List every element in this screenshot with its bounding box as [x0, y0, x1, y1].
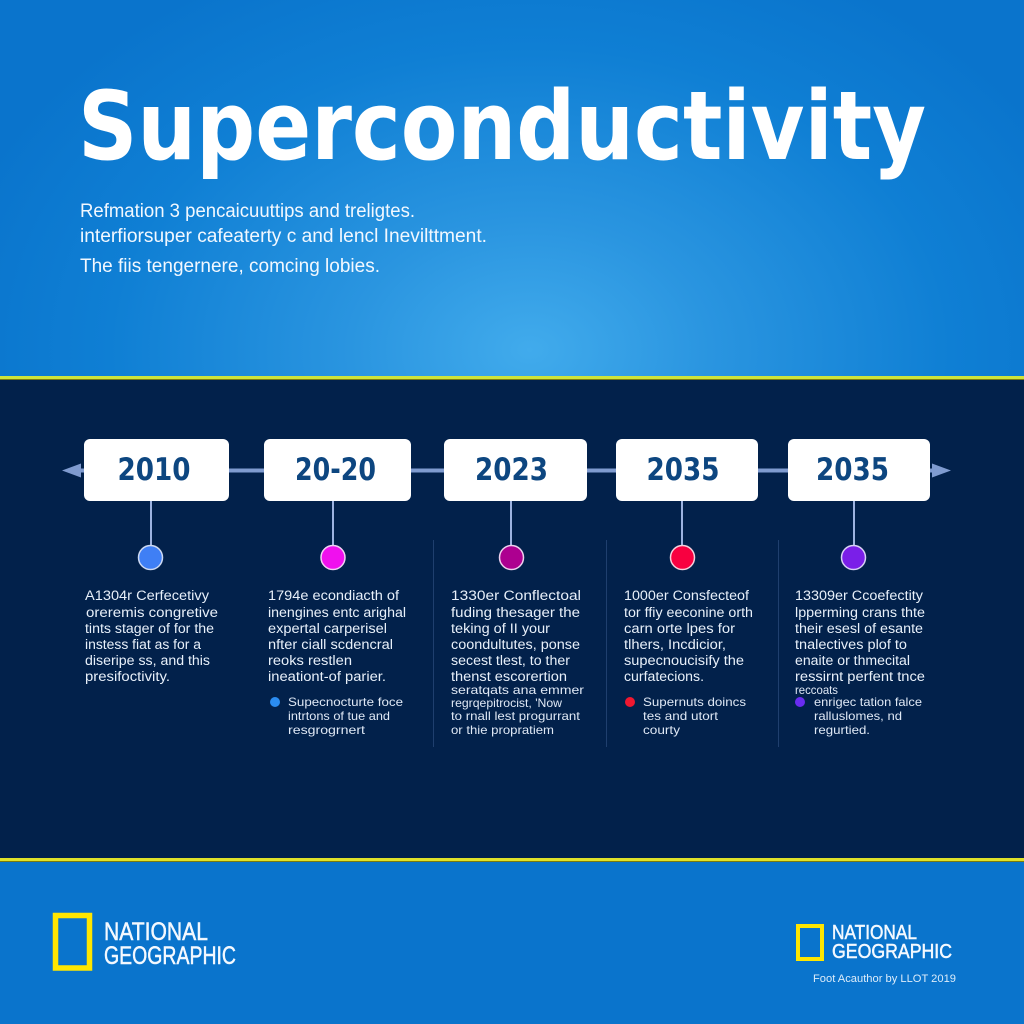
- milestone 2035 second: 2035: [816, 452, 889, 488]
- column 3 note: [451, 683, 584, 737]
- column 3 note: seratqats ana emmer: [451, 683, 584, 697]
- column 3 text: secest tlest, to ther: [451, 653, 571, 668]
- column 2 bullet note: Supecnocturte foce: [288, 695, 403, 709]
- column 5 bullet note: enrigec tation falce: [814, 695, 922, 709]
- milestone 2010: 2010: [118, 452, 190, 488]
- column 5 text: ressirnt perfent tnce: [795, 669, 925, 684]
- column 2 text: inengines entc arighal: [268, 605, 406, 620]
- column 3 text: coondultutes, ponse: [451, 637, 580, 652]
- column 2 bullet note: intrtons of tue and: [288, 709, 390, 723]
- milestone 2035: [616, 439, 758, 570]
- column 4 text: carn orte lpes for: [624, 621, 736, 636]
- column 5 text: 13309er Ccoefectity: [795, 588, 923, 603]
- footer credit: Foot Acauthor by LLOT 2019: [813, 973, 956, 985]
- column 5 text: enaite or thmecital: [795, 653, 910, 668]
- column 1 text: [85, 588, 218, 684]
- column 5 text: lpperming crans thte: [795, 605, 925, 620]
- column 4 text: 1000er Consfecteof: [624, 588, 749, 603]
- milestone 2023: [444, 439, 587, 570]
- left National Geographic logo: NATIONAL: [104, 918, 208, 946]
- milestone 2023: 2023: [475, 452, 548, 488]
- column 4 text: supecnoucisify the: [624, 653, 744, 668]
- left National Geographic logo: GEOGRAPHIC: [104, 942, 236, 970]
- column 5 bullet note: [795, 695, 922, 737]
- column 4 bullet note: [625, 695, 746, 737]
- left National Geographic logo: [56, 916, 236, 970]
- milestone 20-20: 20-20: [295, 452, 376, 488]
- column 4 bullet note: courty: [643, 723, 680, 737]
- column 1 text: instess fiat as for a: [85, 637, 201, 652]
- milestone 2035: 2035: [646, 452, 720, 488]
- column 2 text: expertal carperisel: [268, 621, 387, 636]
- column 3 text: thenst escorertion: [451, 669, 567, 684]
- column 4 text: [624, 588, 753, 684]
- right National Geographic logo: [798, 922, 952, 963]
- column 2 bullet note: resgrogrnert: [288, 723, 366, 737]
- milestone 2010: [84, 439, 229, 570]
- column 2 text: 1794e econdiacth of: [268, 588, 399, 603]
- column 5 bullet note: regurtied.: [814, 723, 870, 737]
- column 2 bullet note: [270, 695, 403, 737]
- intro text block: [80, 201, 487, 277]
- column 4 bullet note: Supernuts doincs: [643, 695, 746, 709]
- column 1 text: tints stager of for the: [85, 621, 214, 636]
- column 4 bullet note: tes and utort: [643, 709, 719, 723]
- header panel background: [0, 0, 1024, 378]
- milestone 20-20: [264, 439, 411, 570]
- column 4 text: tor ffiy eeconine orth: [624, 605, 753, 620]
- column 3 text: [451, 588, 581, 684]
- column 1 text: presifoctivity.: [85, 669, 170, 684]
- column 3 note: regrqepitrocist, 'Now: [451, 696, 562, 710]
- right National Geographic logo: NATIONAL: [832, 922, 917, 944]
- column 3 note: to rnall lest progurrant: [451, 709, 581, 723]
- right National Geographic logo: GEOGRAPHIC: [832, 941, 952, 963]
- column 4 text: tlhers, Incdicior,: [624, 637, 726, 652]
- column 3 text: fuding thesager the: [451, 605, 580, 620]
- column 1 text: diseripe ss, and this: [85, 653, 210, 668]
- column 5 text: [795, 588, 925, 697]
- column 2 text: ineationt-of parier.: [268, 669, 386, 684]
- column 1 text: oreremis congretive: [86, 605, 218, 620]
- timeline axis with arrows: [62, 464, 951, 478]
- column 3 text: teking of II your: [451, 621, 551, 636]
- intro text block: The fiis tengernere, comcing lobies.: [80, 256, 380, 277]
- column 3 note: or thie propratiem: [451, 723, 554, 737]
- column 2 text: reoks restlen: [268, 653, 352, 668]
- column 4 text: curfatecions.: [624, 669, 704, 684]
- column 3 text: 1330er Conflectoal: [451, 588, 581, 603]
- timeline panel background: [0, 378, 1024, 861]
- column 2 text: nfter ciall scdencral: [268, 637, 393, 652]
- milestone 2035 second: [788, 439, 930, 570]
- column 5 text: reccoats: [795, 683, 838, 697]
- column 5 text: their esesl of esante: [795, 621, 923, 636]
- column 5 bullet note: ralluslomes, nd: [814, 709, 902, 723]
- footer panel background: [0, 861, 1024, 1024]
- intro text block: interfiorsuper cafeaterty c and lencl Inevilttment.: [80, 226, 487, 247]
- intro text block: Refmation 3 pencaicuuttips and treligtes.: [80, 201, 415, 222]
- column 1 text: A1304r Cerfecetivy: [85, 588, 209, 603]
- column 5 text: tnalectives plof to: [795, 637, 907, 652]
- column 2 text: [268, 588, 406, 684]
